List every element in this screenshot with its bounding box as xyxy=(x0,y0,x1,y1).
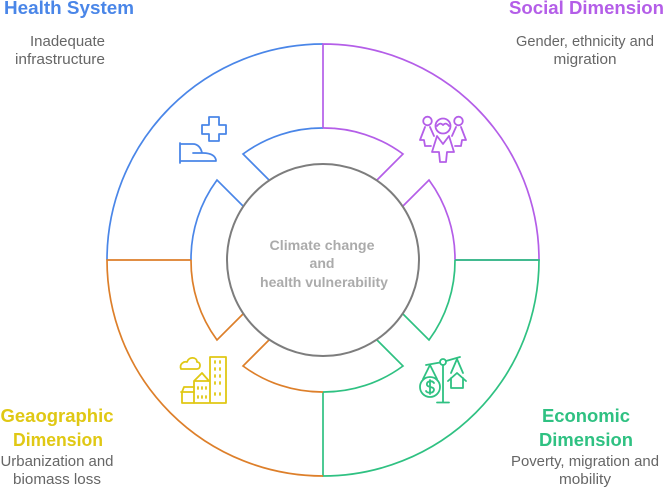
heading: geographic dimension: Geaographic xyxy=(0,406,114,426)
segment: economic dimension xyxy=(323,260,539,476)
center text: health vulnerability xyxy=(260,274,388,290)
icon: health xyxy=(180,117,226,163)
segment: geographic dimension xyxy=(107,260,323,476)
icon: economic scale xyxy=(420,357,466,402)
heading: economic dimension xyxy=(539,406,633,450)
text: health description xyxy=(15,34,105,68)
heading: geographic dimension: Dimension xyxy=(13,430,103,450)
heading: economic dimension: Dimension xyxy=(539,430,633,450)
icon: social people xyxy=(420,117,466,162)
segment: social dimension xyxy=(323,44,539,260)
icon: urban buildings xyxy=(181,357,226,403)
text: social description: migration xyxy=(554,52,616,68)
segment: health system xyxy=(107,44,323,260)
text: health description: infrastructure xyxy=(15,52,105,68)
center text: and xyxy=(310,255,334,271)
text: economic description: Poverty, migration and xyxy=(511,454,659,470)
center text xyxy=(260,237,388,290)
center circle xyxy=(227,164,419,356)
text: geographic description xyxy=(0,454,114,487)
text: health description: Inadequate xyxy=(30,34,105,50)
text: social description xyxy=(516,34,654,68)
heading: geographic dimension xyxy=(0,406,114,450)
center text: Climate change xyxy=(270,237,375,253)
text: social description: Gender, ethnicity and xyxy=(516,34,654,50)
text: economic description xyxy=(511,454,659,487)
text: geographic description: Urbanization and xyxy=(0,454,114,470)
heading: economic dimension: Economic xyxy=(542,406,630,426)
